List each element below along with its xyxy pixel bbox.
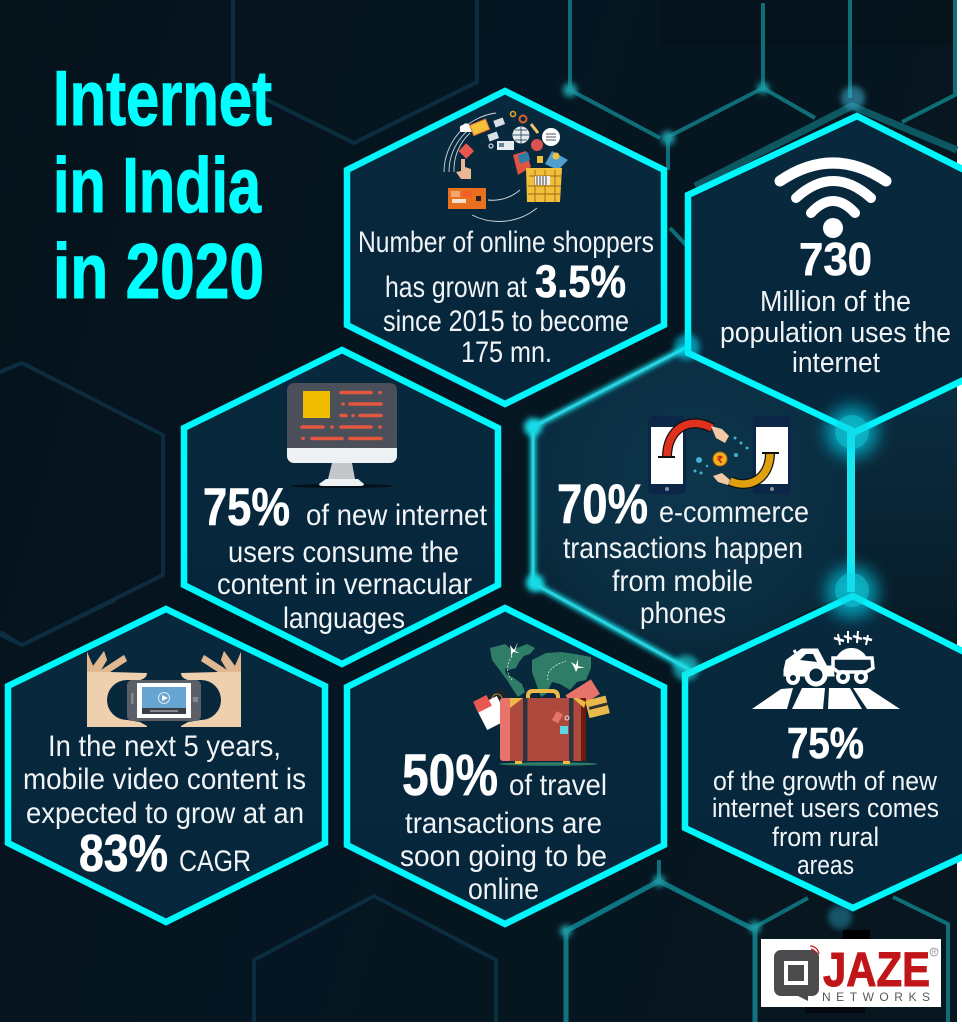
text: 70% e-commerce: e-commerce	[659, 496, 809, 529]
icon: phones exchanging money: ₹	[717, 455, 724, 466]
text: 70% e-commerce: 70%	[557, 472, 648, 535]
text: 50% travel: transactions are	[405, 807, 602, 840]
text: online shoppers: has grown at	[385, 271, 528, 304]
text: 75% rural: areas	[797, 850, 854, 880]
text: online shoppers: 3.5%	[535, 256, 626, 307]
text: 83% CAGR: mobile video content is	[23, 763, 306, 796]
logo: Jaze Networks: JAZE	[823, 944, 930, 997]
text: 83% CAGR	[23, 730, 306, 883]
text: 75% rural: internet users comes	[712, 793, 939, 823]
text: 75% rural	[712, 719, 939, 880]
title	[53, 54, 272, 315]
icon: hands holding phone with video	[87, 651, 241, 727]
text: online shoppers: Number of online shoppers	[358, 226, 654, 259]
panel: mobile video	[8, 609, 325, 922]
panel: travel transactions	[347, 608, 664, 924]
text: 83% CAGR: expected to grow at an	[26, 797, 304, 830]
logo: Jaze Networks: NETWORKS	[822, 990, 930, 1004]
text: 730 million: 730	[799, 233, 872, 285]
icon: suitcase with world map	[473, 642, 610, 766]
text: online shoppers: 175 mn.	[461, 336, 552, 369]
text: 75% rural: 75%	[787, 719, 864, 768]
icon: phones exchanging money	[648, 416, 791, 494]
icon: online shopping cycle	[444, 112, 568, 221]
title: in India	[53, 141, 261, 229]
icon: wifi	[780, 163, 886, 238]
icon: logo speech bubble	[774, 946, 819, 1001]
panel: vernacular content	[184, 350, 498, 664]
text: 70% e-commerce: transactions happen	[563, 532, 803, 565]
text: online shoppers: since 2015 to become	[383, 305, 629, 338]
text: 730 million: Million of the	[760, 286, 911, 318]
text: 730 million: internet	[792, 347, 880, 379]
text: 50% travel: of travel	[509, 769, 607, 802]
text: 730 million	[720, 233, 951, 379]
glowing junction nodes	[673, 334, 878, 681]
text: 75% vernacular: content in vernacular	[217, 568, 472, 601]
text: 70% e-commerce: from mobile	[612, 565, 753, 598]
title: Internet	[53, 54, 272, 142]
icon: tractor and fields	[752, 631, 900, 709]
text: 75% vernacular: users consume the	[228, 536, 459, 569]
panel: online shoppers	[347, 91, 664, 404]
text: 83% CAGR: 83%	[79, 825, 168, 883]
text: online shoppers	[358, 226, 654, 369]
text: 50% travel: online	[468, 873, 539, 906]
text: 75% vernacular: 75%	[203, 478, 290, 537]
panel: population online	[688, 116, 962, 432]
text: 50% travel: soon going to be	[400, 840, 607, 873]
text: 75% rural: of the growth of new	[713, 766, 937, 796]
logo: Jaze Networks	[761, 930, 941, 1013]
logo: Jaze Networks: R	[932, 950, 937, 956]
icon: desktop monitor	[287, 383, 397, 488]
panel: rural growth	[685, 596, 962, 908]
panel: mobile e-commerce transactions	[524, 347, 852, 670]
text: 75% vernacular: of new internet	[306, 499, 488, 532]
text: 50% travel: 50%	[402, 743, 498, 808]
text: 75% vernacular	[203, 478, 488, 635]
text: 83% CAGR: In the next 5 years,	[48, 730, 281, 763]
title: in 2020	[53, 227, 264, 315]
text: 70% e-commerce	[557, 472, 809, 630]
text: 50% travel	[400, 743, 607, 906]
text: 75% vernacular: languages	[283, 602, 405, 635]
text: 75% rural: from rural	[772, 822, 879, 852]
text: 83% CAGR: CAGR	[179, 845, 251, 878]
text: 70% e-commerce: phones	[640, 597, 726, 630]
